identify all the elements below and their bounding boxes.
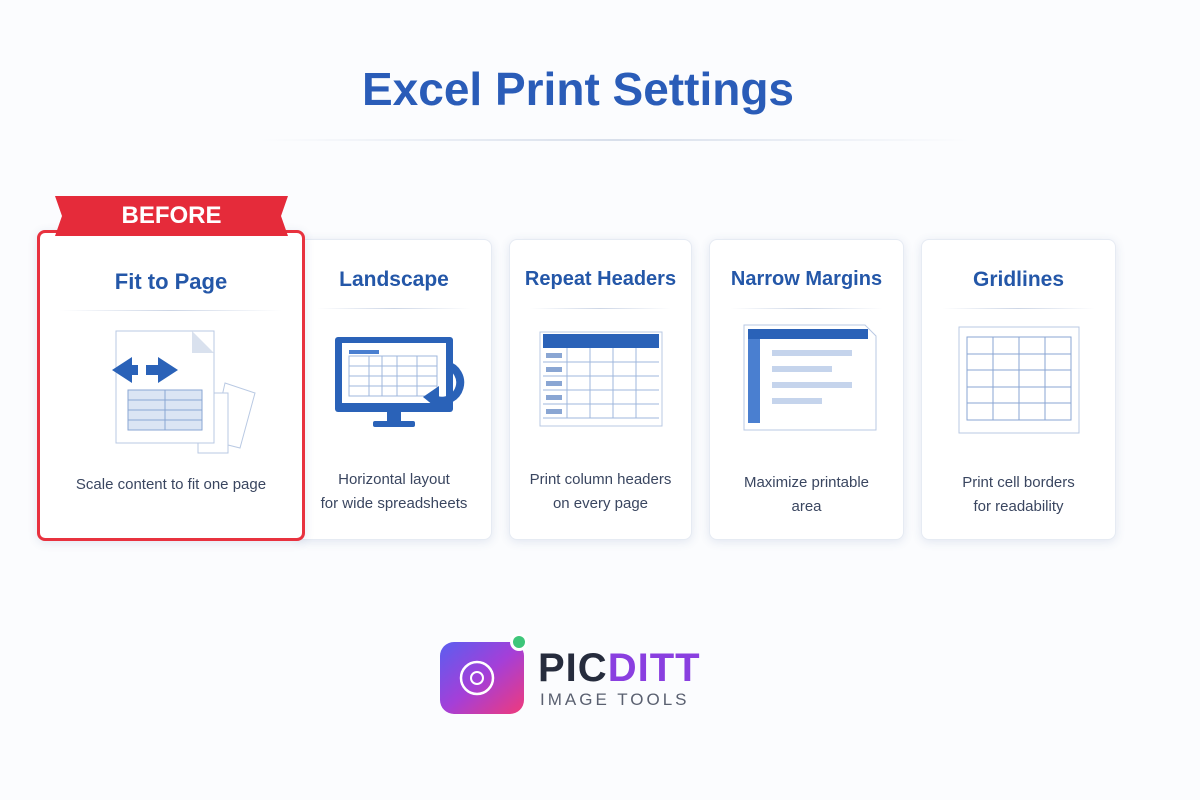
title: Excel Print Settings xyxy=(362,63,794,115)
caption: area xyxy=(791,498,822,515)
card: repeat headers: Repeat Headers xyxy=(525,268,676,290)
card: gridlines xyxy=(921,239,1116,540)
caption: Print cell borders xyxy=(962,474,1075,491)
caption: Maximize printable xyxy=(744,474,869,491)
card: repeat headers xyxy=(509,239,692,540)
logo text: PICDITT xyxy=(538,646,701,690)
caption: for wide spreadsheets xyxy=(321,495,467,512)
banner: BEFORE xyxy=(55,196,288,236)
icon: table with header xyxy=(540,332,662,426)
caption xyxy=(320,471,467,512)
caption: for readability xyxy=(973,498,1064,515)
card: gridlines: Gridlines xyxy=(973,268,1064,291)
caption: Print column headers xyxy=(530,471,671,488)
caption: Scale content to fit one page xyxy=(76,476,266,493)
card: narrow margins xyxy=(709,239,904,540)
banner: BEFORE: BEFORE xyxy=(121,202,222,229)
icon: logo camera xyxy=(440,636,525,714)
card: landscape xyxy=(296,239,492,540)
card: landscape: Landscape xyxy=(339,268,449,291)
icon: grid xyxy=(958,326,1080,434)
caption: Horizontal layout xyxy=(338,471,450,488)
caption: on every page xyxy=(553,495,648,512)
card: narrow margins: Narrow Margins xyxy=(731,268,882,290)
icon: page with margins xyxy=(744,324,876,430)
icon: monitor xyxy=(335,337,464,427)
card: fit to page (before) xyxy=(37,230,305,541)
caption xyxy=(530,471,671,512)
logo: picditt: IMAGE TOOLS xyxy=(540,690,690,709)
caption xyxy=(744,474,869,515)
icon: pages with arrows xyxy=(112,330,256,454)
logo: picditt xyxy=(440,636,701,714)
card: fit to page (before): Fit to Page xyxy=(115,269,227,294)
caption xyxy=(962,474,1075,515)
